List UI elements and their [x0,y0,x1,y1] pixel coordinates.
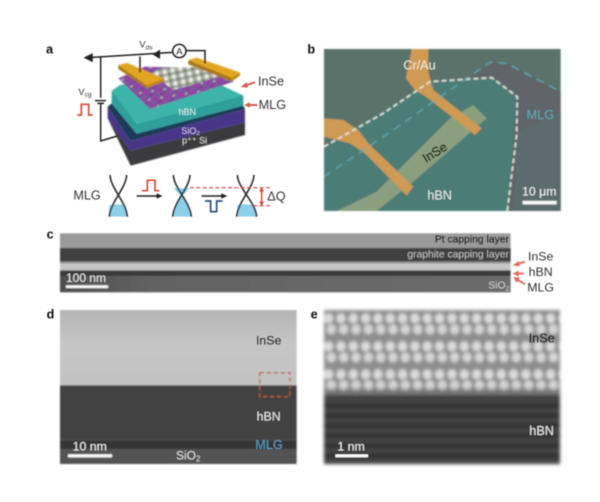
layer captions: SiO [488,281,506,292]
side labels: MLG [527,280,554,294]
layer labels: SiO₂ [181,126,200,136]
side labels: hBN [529,265,553,279]
scale bar label: 1 nm [337,440,365,454]
label SiO2: SiO [176,448,196,462]
label Vds: V [139,40,146,50]
label a: a [46,43,54,57]
panel c: cross-section overview [47,227,554,294]
MLG label with arrow: MLG [259,98,286,112]
micrograph [324,49,561,211]
TEM image [60,310,297,464]
label InSe: InSe [420,140,450,166]
panel b: optical micrograph [307,42,561,211]
panel e: atomic-resolution image [311,308,560,464]
layer labels [179,107,207,146]
label c: c [47,227,54,241]
label d: d [47,308,54,322]
label hBN: hBN [427,188,452,202]
MLG label with arrow [244,98,286,112]
arrows to layers [513,261,525,284]
InSe label with arrow [241,75,284,89]
label Cr/Au: Cr/Au [403,58,436,72]
label Vcg: V [78,87,85,97]
layer labels: p⁺⁺ Si [182,136,207,146]
gate pulse [77,104,93,115]
scale bar label: 10 μm [522,184,556,198]
label Vcg: cg [85,92,92,99]
label hBN: hBN [529,424,554,438]
panel d: TEM cross-section [47,308,297,464]
voltmeter A: A [176,46,183,56]
label b: b [307,42,315,56]
label e: e [311,308,318,322]
layer captions: 2 [506,286,510,293]
side labels: InSe [528,250,553,264]
label MLG: MLG [527,108,554,122]
device stack [108,58,245,166]
layer captions [66,235,510,293]
layer labels: hBN [179,107,196,117]
label Vds: ds [146,44,153,51]
scale bar [335,454,368,457]
layer captions: graphite capping layer [407,249,510,260]
label InSe: InSe [529,331,555,345]
STEM image [324,310,560,464]
circuit wiring [85,44,205,141]
label SiO2: 2 [196,455,201,464]
side labels [527,250,554,294]
scale bar label: 10 nm [73,440,107,454]
layer captions: 100 nm [66,271,106,285]
TEM strip [60,233,511,292]
band diagrams [73,175,286,217]
InSe label with arrow: InSe [258,75,284,89]
band diagrams: MLG [73,189,101,203]
panel a: device schematic [46,40,286,217]
band diagrams: ΔQ [267,190,286,204]
label InSe: InSe [256,334,281,348]
label MLG: MLG [255,438,283,452]
layer captions: Pt capping layer [435,235,510,246]
label hBN: hBN [257,410,281,424]
